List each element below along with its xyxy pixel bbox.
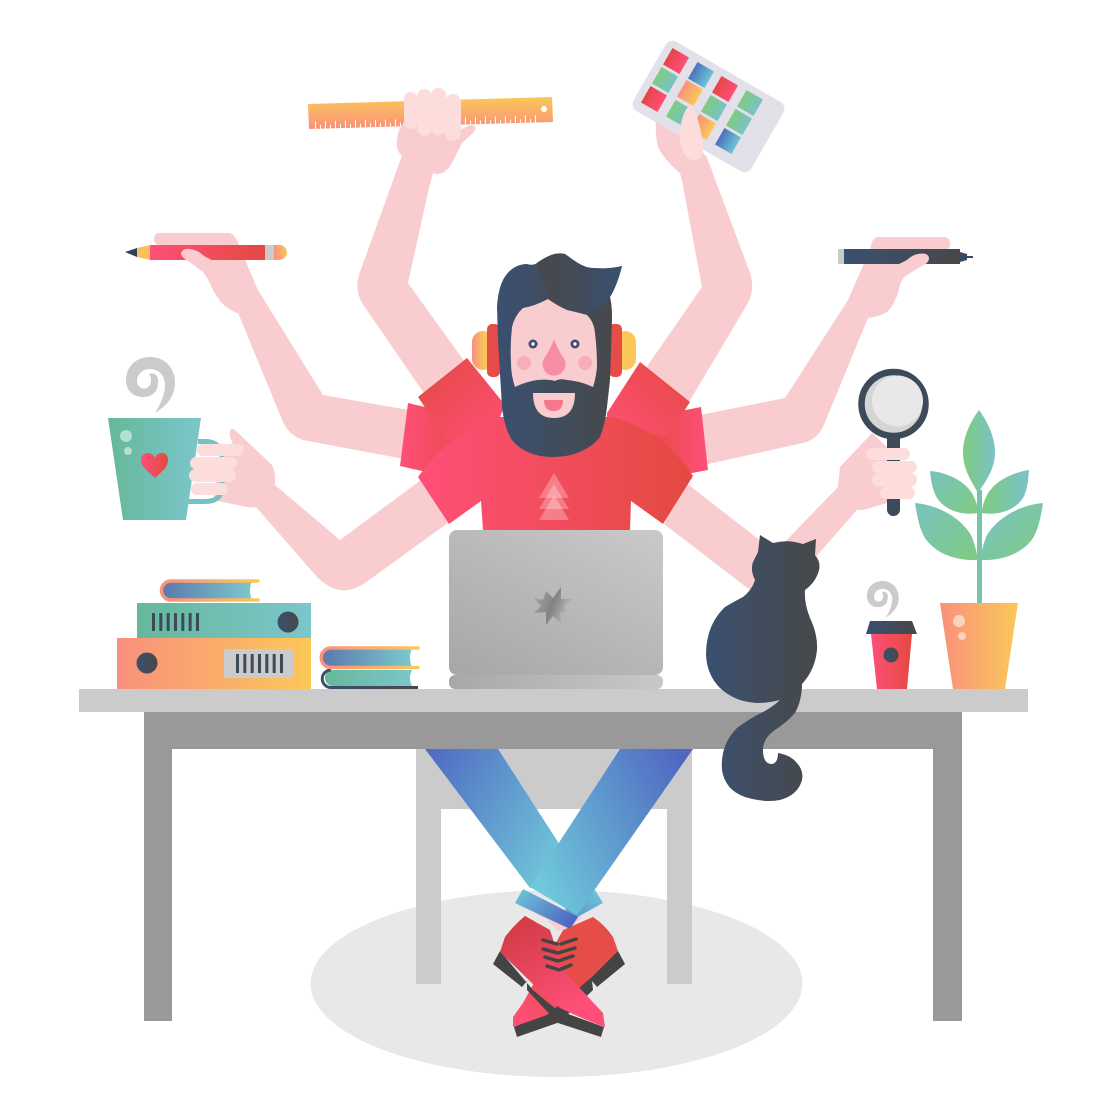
ruler [308, 97, 553, 129]
ruler ticks [315, 117, 536, 127]
colour palette [630, 38, 787, 175]
back sleeve right [645, 407, 708, 480]
takeaway coffee cup [866, 621, 917, 689]
upper sleeve right [607, 362, 690, 437]
upper sleeve left [418, 358, 505, 442]
thumb on pen [889, 254, 929, 285]
arm: lower right holding magnifier [664, 433, 890, 593]
thumb over palette [680, 105, 703, 160]
leaves [963, 410, 995, 493]
hair quiff [537, 253, 622, 315]
cheeks [517, 356, 592, 370]
back trouser leg [425, 749, 576, 888]
desk [79, 689, 1028, 1021]
book stack left [117, 581, 311, 689]
left eye [528, 340, 538, 348]
shirt [400, 358, 708, 530]
shoelaces [543, 939, 576, 970]
mug handle [188, 442, 222, 502]
face [511, 299, 597, 418]
palm behind palette [656, 110, 712, 185]
front cuff [515, 889, 578, 929]
front trouser leg [530, 749, 693, 915]
laptop logo star [534, 587, 573, 625]
hand gripping ruler [390, 88, 476, 190]
hair and beard [497, 253, 622, 457]
orange binder [117, 638, 311, 689]
fingers around mug [189, 444, 244, 495]
magnifying glass [862, 372, 926, 516]
green binder [137, 603, 311, 638]
back shoe [513, 909, 625, 1037]
hand holding pen, back fingers [848, 237, 950, 318]
upper book [321, 648, 418, 668]
book stack right [321, 648, 418, 688]
front shoe [493, 916, 605, 1037]
mouth [533, 393, 575, 418]
pen [838, 249, 973, 264]
chair [416, 749, 692, 984]
palette swatches [641, 48, 763, 154]
lower book [322, 670, 418, 688]
arm: middle right holding pen [690, 300, 868, 468]
potted plant [915, 410, 1043, 689]
back sleeve left [400, 403, 480, 482]
headphones [472, 324, 636, 377]
cat [706, 535, 820, 801]
steam [126, 357, 175, 413]
pencil [125, 245, 287, 260]
arm: middle left holding pencil [236, 290, 420, 462]
arm: raised right holding palette [640, 155, 752, 412]
nose [542, 339, 566, 376]
hand holding pencil, back fingers [154, 233, 260, 314]
coffee mug [108, 357, 222, 520]
stem [977, 490, 982, 603]
arm: raised left holding ruler [357, 150, 472, 402]
shirt front and lower sleeves [418, 417, 693, 530]
arm: lower left holding mug [213, 429, 452, 590]
pot [940, 603, 1018, 689]
fingers around magnifier [866, 448, 917, 499]
laptop [449, 530, 663, 689]
back cuff [560, 890, 603, 920]
floor shadow [310, 890, 802, 1077]
thumb on pencil [181, 249, 221, 285]
shirt tree emblem [539, 473, 569, 520]
tongue [544, 400, 563, 411]
heart [141, 453, 168, 478]
right eye [570, 340, 580, 348]
top book [162, 581, 258, 600]
steam over coffee cup [867, 581, 899, 617]
